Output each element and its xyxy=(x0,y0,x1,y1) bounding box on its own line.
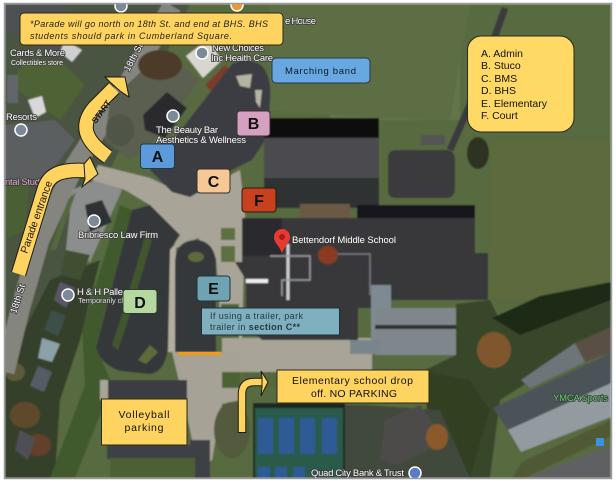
arrow: elementary drop off xyxy=(242,371,268,433)
map place labels: ntal Stud xyxy=(5,177,40,188)
arrow: start xyxy=(86,77,129,157)
18th Street xyxy=(5,6,172,372)
callout: parade note: students should park in Cumberland Square. xyxy=(30,31,232,41)
callout: elementary drop off: off. NO PARKING xyxy=(311,388,397,400)
marker C: C xyxy=(208,174,220,191)
map place labels: Cards & More xyxy=(10,48,65,59)
beauty bar building xyxy=(143,92,187,138)
gray gym building xyxy=(371,285,391,345)
left neighbourhood xyxy=(6,4,190,328)
callout: volleyball parking: Volleyball xyxy=(118,409,170,421)
tennis courts xyxy=(253,403,345,478)
marker E: E xyxy=(208,281,219,298)
callout: trailer note: trailer in section C** xyxy=(210,322,300,332)
map place labels: Aesthetics & Wellness xyxy=(156,135,246,146)
lot D xyxy=(96,205,180,374)
callout: parade note: *Parade will go north on 18th St. and end at BHS. BHS xyxy=(30,19,268,29)
arrow label: START xyxy=(90,98,113,125)
callout: trailer note: If using a trailer, park xyxy=(210,311,304,321)
callout: volleyball parking xyxy=(102,399,187,445)
map place labels: 18th St xyxy=(8,283,28,315)
marker A xyxy=(140,144,174,168)
legend: E. Elementary xyxy=(481,98,548,110)
marker B xyxy=(237,111,270,136)
marker E xyxy=(197,276,230,301)
new choices building xyxy=(186,40,222,78)
legend: D. BHS xyxy=(481,85,516,97)
callout: parade note xyxy=(20,13,283,45)
map place labels: Temporarily cl xyxy=(78,296,123,305)
legend: C. BMS xyxy=(481,73,517,85)
volleyball lot xyxy=(107,380,187,450)
arrow: parade entrance xyxy=(18,157,98,274)
lot E xyxy=(175,240,216,352)
map place labels: The Beauty Bar xyxy=(156,125,218,136)
callout: trailer note xyxy=(202,308,340,335)
grass strip xyxy=(50,205,132,478)
map place labels: e House xyxy=(285,16,316,27)
orange line xyxy=(178,352,221,355)
map place labels: H & H Palle xyxy=(77,287,123,298)
label: marching band xyxy=(272,58,370,83)
legend: A. Admin xyxy=(481,48,523,60)
map place labels: Resorts xyxy=(6,112,37,123)
marker C xyxy=(197,169,230,193)
houses on left xyxy=(64,254,84,278)
legend xyxy=(468,36,574,132)
marker F: F xyxy=(254,193,264,210)
map place labels: New Choices xyxy=(212,43,264,54)
lower left trees xyxy=(5,260,100,478)
callout: volleyball parking: parking xyxy=(124,422,164,434)
marker A: A xyxy=(152,149,164,166)
map place labels: Bribriesco Law Firm xyxy=(78,230,158,241)
forest right xyxy=(425,285,611,478)
marker F xyxy=(242,188,276,212)
map place labels: YMCA Sports xyxy=(553,393,608,404)
bank building xyxy=(380,405,433,464)
map place labels: 18th St xyxy=(122,41,146,73)
callout: elementary drop off xyxy=(277,370,429,403)
callout: elementary drop off: Elementary school drop xyxy=(292,375,413,387)
map place labels: Inc Health Care xyxy=(211,53,273,64)
concrete plaza and sidewalks xyxy=(92,165,245,340)
main school roof xyxy=(235,218,488,340)
bottom right road and lot xyxy=(525,445,611,478)
arrow label: Parade entrance xyxy=(19,179,55,255)
law firm lot xyxy=(66,178,122,262)
legend: B. Stuco xyxy=(481,60,521,72)
label: marching band: Marching band xyxy=(285,66,356,77)
building roof upper xyxy=(264,118,379,138)
main lot A/B/C xyxy=(150,60,270,197)
map place labels: Collectibles store xyxy=(11,60,63,67)
marker D: D xyxy=(134,295,146,312)
marker B: B xyxy=(248,116,259,133)
map place labels: Quad City Bank & Trust xyxy=(311,468,404,479)
map place labels: Bettendorf Middle School xyxy=(292,235,396,246)
school location pin xyxy=(274,229,290,253)
YMCA building xyxy=(521,343,585,388)
rear lot and drive xyxy=(388,150,455,198)
trees beside beauty bar xyxy=(105,66,200,160)
legend: F. Court xyxy=(481,110,518,122)
marker D xyxy=(123,290,157,314)
